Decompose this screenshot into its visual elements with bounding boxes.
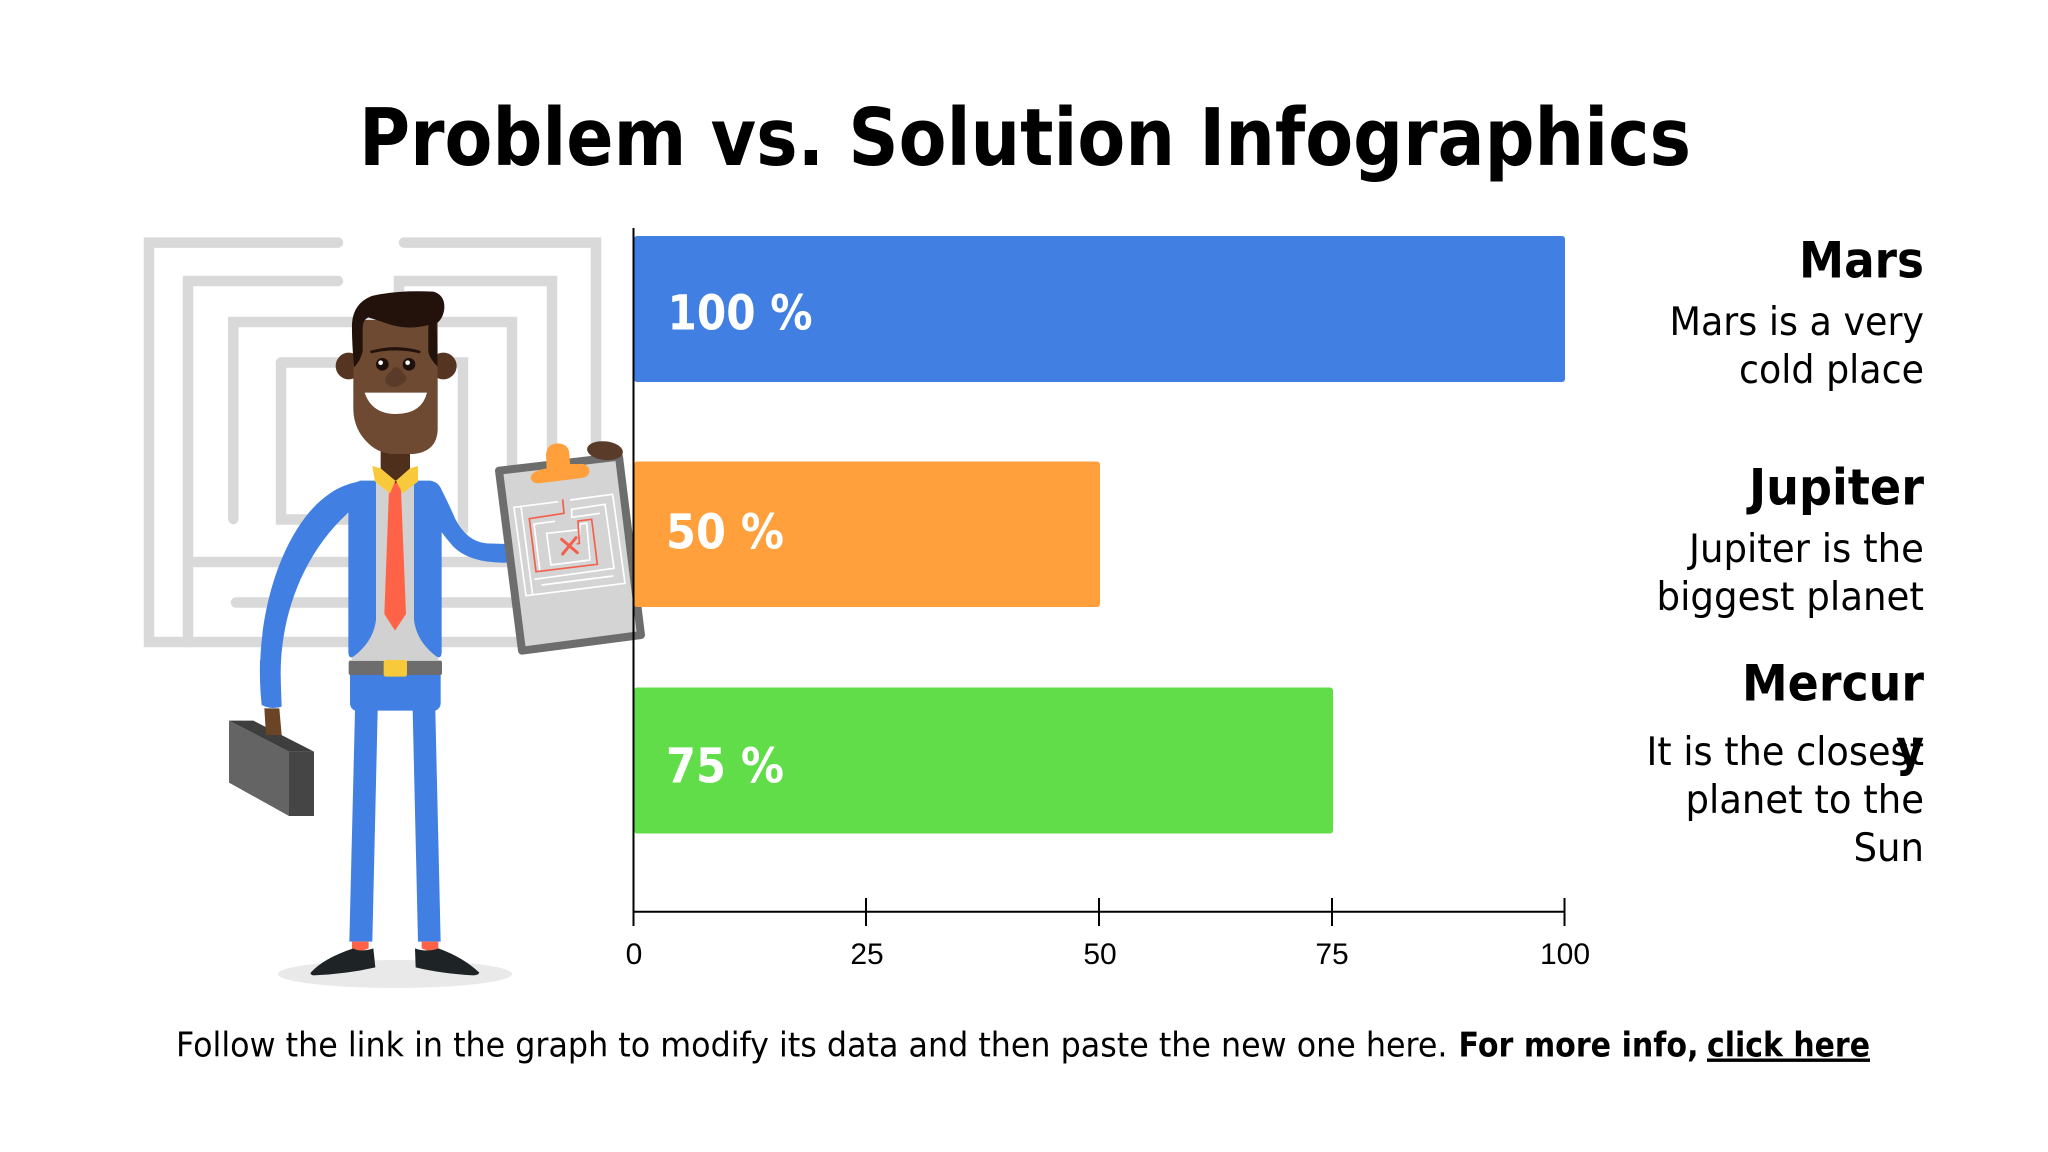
lower body	[229, 660, 479, 975]
axis labels: 0	[626, 938, 642, 971]
text block: Mars: cold place	[1739, 348, 1924, 393]
axis labels: 25	[850, 938, 884, 971]
text block: Jupiter: Jupiter is the	[1686, 527, 1924, 572]
nose	[385, 367, 406, 387]
left hand	[264, 708, 282, 735]
axes	[633, 228, 1565, 926]
bar: 100 percent: 100 %	[668, 286, 812, 342]
text block: Mars	[1670, 232, 1924, 393]
bar: 75 percent: 75 %	[666, 738, 784, 794]
text block: Mercury: planet to the	[1686, 778, 1924, 823]
hand on clipboard	[586, 440, 624, 462]
left arm	[260, 481, 363, 682]
red route	[529, 499, 597, 572]
axis labels: 50	[1083, 938, 1117, 971]
illustration: maze background	[149, 243, 596, 642]
axis labels	[626, 938, 1590, 971]
mini maze	[514, 494, 625, 596]
eyebrow	[370, 347, 421, 353]
text block: Mercury: Mercur	[1742, 654, 1924, 712]
left forearm	[260, 660, 282, 708]
text block: Mercury: It is the closest	[1646, 730, 1924, 775]
head and collar	[336, 291, 457, 493]
clipboard and right arm	[430, 440, 641, 651]
eyes	[376, 358, 389, 371]
footer note: For more info,	[1458, 1026, 1698, 1066]
bar: 75 percent	[634, 688, 1333, 834]
axis labels: 75	[1315, 938, 1349, 971]
text block: Jupiter: Jupiter	[1746, 458, 1924, 516]
text block: Mars: Mars is a very	[1670, 300, 1924, 345]
axis labels: 100	[1540, 938, 1590, 971]
neck	[381, 448, 410, 483]
belt buckle	[384, 660, 407, 677]
bar: 50 percent: 50 %	[666, 504, 784, 560]
ears	[336, 353, 362, 379]
title: Problem vs. Solution Infographics	[359, 92, 1691, 184]
footer note: click here	[1707, 1026, 1870, 1066]
face	[353, 320, 438, 454]
right arm	[430, 481, 507, 563]
socks	[352, 942, 438, 952]
text block: Mercury: y	[1896, 719, 1924, 777]
collar	[372, 466, 418, 493]
bar: 50 percent	[634, 462, 1100, 607]
hair	[352, 291, 444, 367]
red x mark	[562, 538, 577, 554]
text block: Jupiter	[1656, 458, 1924, 620]
ground shadow	[278, 960, 512, 988]
clip	[531, 443, 589, 483]
illustration: businessman	[229, 291, 641, 988]
jacket left panel	[348, 481, 376, 657]
text block: Mercury: Sun	[1854, 826, 1924, 871]
text block: Jupiter: biggest planet	[1656, 575, 1924, 620]
board	[499, 457, 641, 651]
briefcase	[229, 721, 314, 816]
shirt	[352, 481, 438, 660]
shoes	[311, 948, 479, 975]
tie	[384, 481, 406, 631]
trousers	[349, 673, 441, 942]
belt	[349, 660, 442, 677]
torso	[260, 481, 442, 682]
smile	[365, 393, 427, 414]
jacket right panel	[414, 481, 442, 657]
bar chart	[626, 228, 1590, 971]
bar: 100 percent	[634, 236, 1565, 382]
footer note: Follow the link in the graph to modify its data and then paste the new one here.	[176, 1026, 1448, 1066]
text block: Mars: Mars	[1799, 232, 1924, 290]
text block: Mercury	[1646, 654, 1924, 871]
